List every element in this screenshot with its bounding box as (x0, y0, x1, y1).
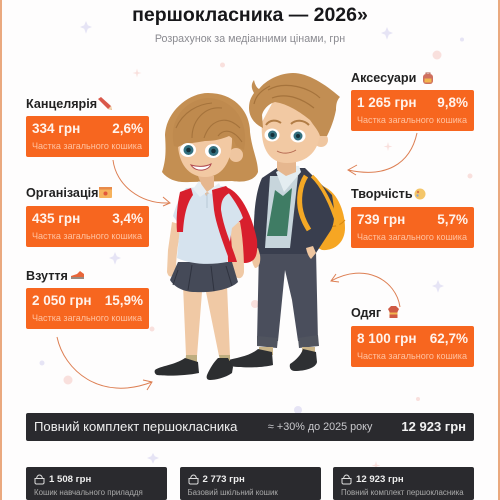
arrow: shoes to girl (57, 337, 152, 390)
card: footwear: Частка загального кошика (32, 313, 142, 323)
summary label: Повний комплект першокласника (34, 419, 237, 434)
card: clothing: 62,7% (430, 331, 468, 346)
panel: creativity (351, 187, 474, 248)
icon: shoe (71, 271, 84, 279)
card: organization: 435 грн (32, 211, 80, 226)
title: першокласника — 2026» (132, 4, 368, 26)
card: basic school basket (180, 467, 320, 500)
card: clothing: 8 100 грн (357, 331, 417, 346)
value: 1 508 грн (49, 474, 91, 485)
card: school supplies basket (26, 467, 167, 500)
arrow: accessories to boy (348, 133, 417, 175)
icon: basket (188, 474, 198, 484)
arrow: clothing to boy (331, 273, 400, 307)
card: full set (333, 467, 474, 500)
card: creativity: 5,7% (437, 212, 468, 227)
card: accessories (351, 90, 474, 130)
page border: left (0, 0, 2, 500)
icon: backpack (423, 72, 433, 84)
icon: organizer box (99, 187, 112, 198)
card: accessories: 9,8% (437, 95, 468, 110)
icon: palette (414, 188, 426, 200)
value: 12 923 грн (356, 474, 404, 485)
card: organization (26, 206, 149, 246)
panel: accessories (351, 71, 474, 131)
description: Базовий шкільний кошик (188, 488, 278, 497)
panel: clothing (351, 306, 474, 367)
subtitle: Розрахунок за медіанними цінами, грн (155, 33, 345, 45)
value: 2 773 грн (202, 474, 245, 485)
description: Кошик навчального приладдя (34, 488, 143, 497)
summary growth note: ≈ +30% до 2025 року (268, 421, 372, 433)
card: stationery (26, 116, 149, 156)
icon: shirt (388, 306, 399, 318)
card: stationery: 2,6% (112, 121, 143, 136)
description: Повний комплект першокласника (341, 488, 464, 497)
card: stationery: Частка загального кошика (32, 141, 142, 151)
page border: right (498, 0, 500, 500)
card: accessories: Частка загального кошика (357, 115, 467, 125)
heading: stationery: Канцелярія (26, 97, 97, 111)
arrow: stationery to girl (113, 160, 170, 206)
card: footwear (26, 288, 149, 328)
heading: creativity: Творчість (351, 187, 413, 201)
card: accessories: 1 265 грн (357, 95, 417, 110)
card: creativity: Частка загального кошика (357, 232, 467, 242)
card: stationery: 334 грн (32, 121, 80, 136)
card: clothing: Частка загального кошика (357, 351, 467, 361)
card: organization: Частка загального кошика (32, 231, 142, 241)
panel: footwear (26, 269, 149, 329)
summary total: 12 923 грн (401, 419, 466, 434)
panel: organization (26, 186, 149, 247)
panel: stationery (26, 97, 149, 157)
card: creativity (351, 207, 474, 248)
icon: basket (342, 474, 352, 484)
card: organization: 3,4% (112, 211, 143, 226)
summary bar (26, 413, 474, 441)
card: creativity: 739 грн (357, 212, 405, 227)
heading: organization: Організація (26, 186, 99, 200)
icon: basket (34, 474, 44, 484)
heading: accessories: Аксесуари (351, 71, 416, 85)
card: clothing (351, 326, 474, 366)
card: footwear: 15,9% (105, 293, 143, 308)
icon: pencil (98, 97, 112, 110)
heading: footwear: Взуття (26, 269, 68, 283)
heading: clothing: Одяг (351, 306, 381, 320)
card: footwear: 2 050 грн (32, 293, 92, 308)
